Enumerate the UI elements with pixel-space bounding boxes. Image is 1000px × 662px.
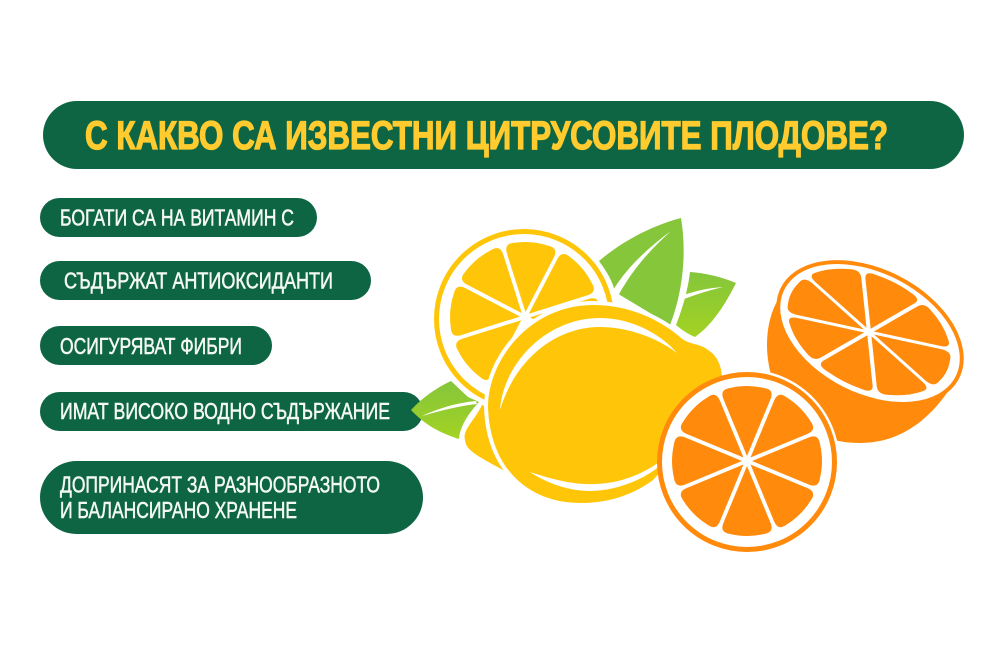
item: balanced diet: И БАЛАНСИРАНО ХРАНЕНЕ xyxy=(60,497,297,523)
icon: citrus fruit illustration xyxy=(411,218,988,554)
icon: small right leaf xyxy=(676,272,736,337)
icon: big leaf xyxy=(599,218,684,325)
icon: left leaf xyxy=(411,381,479,439)
item: balanced diet: ДОПРИНАСЯТ ЗА РАЗНООБРАЗНОТО xyxy=(60,472,380,498)
item: vitamin C: БОГАТИ СА НА ВИТАМИН С xyxy=(60,204,294,230)
icon: orange half xyxy=(752,231,988,443)
item: antioxidants: СЪДЪРЖАТ АНТИОКСИДАНТИ xyxy=(64,268,333,294)
icon: lemon xyxy=(465,305,722,503)
item: vitamin C xyxy=(40,198,317,237)
item: water content: ИМАТ ВИСОКО ВОДНО СЪДЪРЖАНИЕ xyxy=(60,398,390,424)
item: antioxidants xyxy=(40,261,371,300)
item: fibre xyxy=(40,326,272,365)
item: fibre: ОСИГУРЯВАТ ФИБРИ xyxy=(60,333,242,359)
item: balanced diet xyxy=(40,461,423,534)
icon: lemon slice xyxy=(431,226,617,412)
icon: orange slice xyxy=(660,374,834,550)
title xyxy=(43,101,964,169)
item: water content xyxy=(40,392,423,431)
